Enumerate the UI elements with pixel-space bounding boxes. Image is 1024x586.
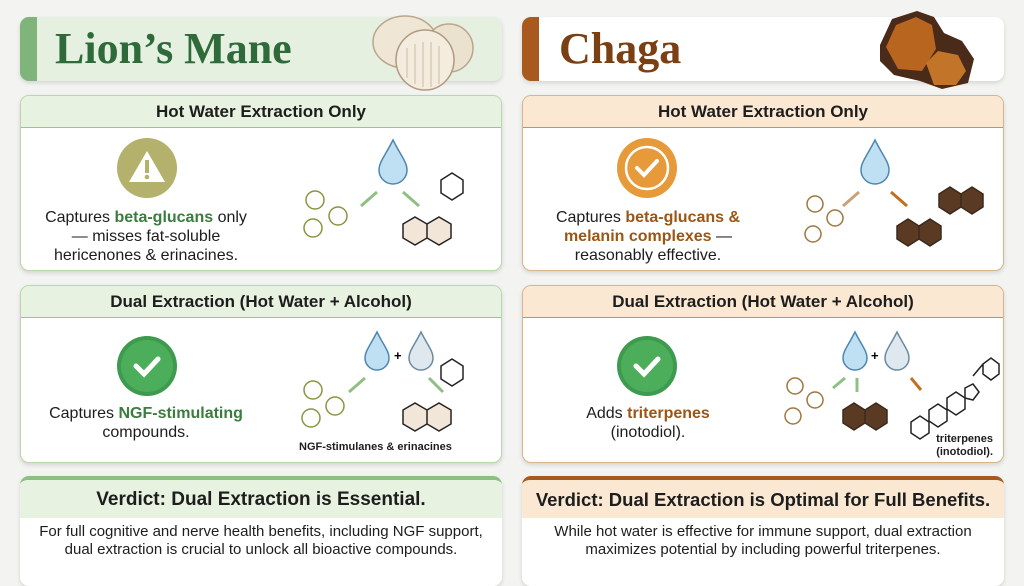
icon: check orange xyxy=(617,138,677,198)
text xyxy=(45,209,247,264)
label: triterpenes: (inotodiol). xyxy=(936,446,993,458)
heading xyxy=(523,286,1003,318)
header: Lion's Mane xyxy=(20,17,502,81)
text: For full cognitive and nerve health benefits, including NGF support, xyxy=(39,523,483,540)
heading xyxy=(21,96,501,128)
heading: Dual Extraction (Hot Water + Alcohol) xyxy=(612,292,914,311)
text: hericenones & erinacines. xyxy=(54,247,238,264)
diagram: water to molecules xyxy=(303,138,464,246)
panel: Lion's Mane hot water xyxy=(20,95,502,271)
heading: Dual Extraction (Hot Water + Alcohol) xyxy=(110,292,412,311)
panel: Chaga verdict xyxy=(522,476,1004,586)
heading: Verdict: Dual Extraction is Essential. xyxy=(96,489,426,510)
header: Chaga xyxy=(522,17,1004,81)
label: NGF compounds: NGF-stimulanes & erinacines xyxy=(299,441,452,453)
text: maximizes potential by including powerful triterpenes. xyxy=(585,541,941,558)
diagram: dual extraction xyxy=(301,330,464,432)
text xyxy=(586,405,710,441)
text: dual extraction is crucial to unlock all bioactive compounds. xyxy=(65,541,457,558)
diagram: water to molecules xyxy=(804,138,984,247)
text xyxy=(39,523,483,558)
icon: chaga chunk xyxy=(880,11,974,89)
panel: Chaga dual xyxy=(522,285,1004,463)
diagram: dual extraction: + xyxy=(871,348,879,363)
text xyxy=(556,209,740,264)
text: (inotodiol). xyxy=(611,424,685,441)
text: compounds. xyxy=(102,424,190,441)
text: Captures NGF-stimulating xyxy=(49,405,243,422)
panel: Lion's Mane verdict xyxy=(20,476,502,586)
panel: Lion's Mane dual xyxy=(20,285,502,463)
heading: Verdict: Dual Extraction is Optimal for Full Benefits. xyxy=(536,489,990,510)
heading xyxy=(523,96,1003,128)
text: Captures beta-glucans only xyxy=(45,209,247,226)
text: Captures beta-glucans & xyxy=(556,209,740,226)
heading: Hot Water Extraction Only xyxy=(658,102,868,121)
text: — misses fat-soluble xyxy=(72,228,220,245)
text: reasonably effective. xyxy=(575,247,721,264)
text: While hot water is effective for immune support, dual extraction xyxy=(554,523,972,540)
heading: Hot Water Extraction Only xyxy=(156,102,366,121)
title: Lion's Mane: Lion’s Mane xyxy=(55,24,292,73)
text xyxy=(49,405,243,441)
heading xyxy=(522,480,1004,518)
diagram: dual extraction: + xyxy=(394,348,402,363)
panel: Chaga hot water xyxy=(522,95,1004,271)
icon: check green xyxy=(117,336,177,396)
label: triterpenes xyxy=(936,433,993,458)
text xyxy=(554,523,972,558)
heading xyxy=(20,480,502,518)
text: melanin complexes — xyxy=(564,228,732,245)
title: Chaga: Chaga xyxy=(559,24,681,73)
icon: warning xyxy=(117,138,177,198)
icon: lion's mane mushroom xyxy=(372,15,474,91)
diagram: dual extraction xyxy=(784,330,1000,440)
heading xyxy=(21,286,501,318)
text: Adds triterpenes xyxy=(586,405,710,422)
icon: check green xyxy=(617,336,677,396)
label: triterpenes: triterpenes xyxy=(936,433,993,445)
